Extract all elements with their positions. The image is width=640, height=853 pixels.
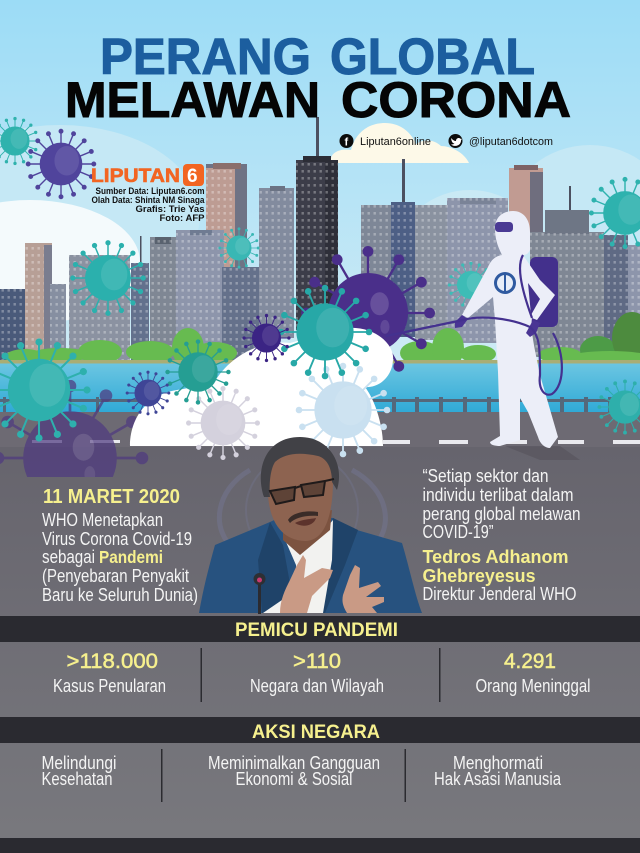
stat: cases: Kasus Penularan: [53, 676, 166, 696]
river: [0, 363, 640, 413]
credits: [92, 186, 205, 224]
text: WHO declaration: (Penyebaran Penyakit: [42, 566, 189, 586]
social: twitter: @liputan6dotcom: [469, 136, 553, 148]
action: health: [42, 753, 116, 789]
date heading: 11 MARET 2020: [43, 486, 180, 508]
virus: teal over trees: [168, 342, 228, 402]
city skyline: [0, 117, 640, 364]
credits: Sumber Data: Liputan6.com: [96, 186, 204, 197]
virus: teal behind worker: [449, 263, 493, 307]
credits: Olah Data: Shinta NM Sinaga: [92, 195, 205, 206]
virus: purple top left: [28, 131, 94, 197]
virus: pale blue: [299, 366, 387, 454]
health worker spraying: [386, 211, 580, 460]
action: human rights: [434, 753, 562, 789]
virus: teal right lower: [599, 381, 640, 433]
action: economy: Ekonomi & Sosial: [236, 769, 352, 789]
virus: teal top left: [0, 119, 37, 163]
quote: “Setiap sektor dan: [422, 466, 548, 486]
sky background: [0, 0, 640, 400]
text: WHO declaration: sebagai: [42, 547, 95, 567]
portrait: Tedros Adhanom: [199, 437, 422, 614]
quote: individu terlibat dalam: [422, 485, 574, 505]
action: health: Melindungi: [42, 753, 116, 773]
virus: teal on building: [73, 243, 143, 313]
white cloud mounds: [130, 328, 393, 446]
stat: cases: >118.000: [66, 649, 158, 673]
fence: [0, 397, 640, 412]
quote attribution: [422, 547, 576, 604]
text: WHO declaration: [42, 510, 198, 605]
title: CORONA: [341, 72, 571, 128]
credits: Foto: AFP: [159, 213, 205, 224]
road: [0, 412, 640, 448]
shoreline: [0, 360, 640, 364]
quote attribution: Direktur Jenderal WHO: [422, 584, 576, 604]
virus: teal centre: [281, 288, 369, 376]
quote: perang global melawan: [422, 504, 580, 524]
quote: [422, 466, 580, 542]
quote attribution: Tedros Adhanom: [422, 547, 568, 567]
band: Aksi Negara: [0, 717, 640, 743]
credits: Grafis: Trie Yas: [135, 204, 204, 215]
band: Pemicu Pandemi: PEMICU PANDEMI: [235, 620, 398, 641]
action: economy: Meminimalkan Gangguan: [208, 753, 380, 773]
virus: large teal left: [0, 342, 87, 438]
text: WHO declaration: Virus Corona Covid-19: [42, 529, 192, 549]
stat: deaths: [476, 649, 590, 696]
action: health: Kesehatan: [42, 769, 112, 789]
stat: cases: [53, 649, 166, 696]
virus: pale lilac: [189, 389, 257, 457]
logo: Liputan6: [91, 164, 204, 187]
action: economy: [208, 753, 380, 789]
text: WHO declaration: Baru ke Seluruh Dunia): [42, 585, 198, 605]
title: PERANG: [100, 28, 311, 85]
logo: Liputan6: LIPUTAN: [91, 166, 180, 187]
virus: small dark purple: [244, 316, 289, 360]
virus: small teal on building: [220, 229, 258, 267]
stat: countries: >110: [293, 649, 341, 673]
social: facebook: Liputan6online: [360, 136, 431, 148]
logo: Liputan6: 6: [187, 166, 198, 187]
virus: small blue-purple: [127, 372, 169, 414]
trees: [5, 312, 640, 368]
action: human rights: Menghormati: [453, 753, 543, 773]
quote: COVID-19”: [422, 522, 494, 542]
virus: teal top right: [591, 179, 640, 247]
stat: deaths: Orang Meninggal: [476, 676, 590, 696]
stat: deaths: 4.291: [504, 649, 556, 673]
virus: large purple: [306, 251, 430, 375]
virus: bottom-left purple: [0, 380, 148, 477]
social: facebook: f: [344, 136, 348, 148]
title: GLOBAL: [330, 28, 535, 85]
band: Pemicu Pandemi: [0, 616, 640, 642]
text: WHO declaration: Pandemi: [99, 547, 163, 567]
title: [65, 28, 571, 128]
footer band: [0, 838, 640, 853]
stat: countries: [250, 649, 384, 696]
stat: countries: Negara dan Wilayah: [250, 676, 384, 696]
band: Aksi Negara: AKSI NEGARA: [252, 722, 380, 743]
background clouds: [0, 123, 640, 324]
text: WHO declaration: WHO Menetapkan: [42, 510, 163, 530]
social: twitter: [448, 134, 553, 148]
social: facebook: [340, 134, 431, 148]
lower panel background: [0, 447, 640, 853]
quote attribution: Ghebreyesus: [422, 566, 536, 586]
title: MELAWAN: [65, 72, 320, 128]
action: human rights: Hak Asasi Manusia: [434, 769, 562, 789]
